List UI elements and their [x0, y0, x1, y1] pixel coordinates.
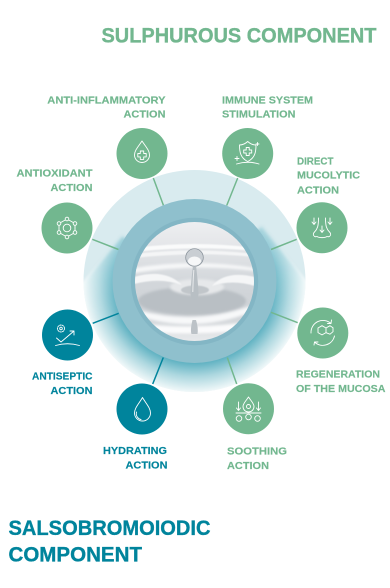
disc shadow: [84, 226, 306, 392]
node: soothing action: [223, 383, 287, 472]
label: STIMULATION: [222, 109, 296, 121]
label: IMMUNE SYSTEM: [222, 94, 313, 106]
label: ACTION: [50, 182, 92, 194]
node: immune system stimulation: [222, 94, 313, 179]
label: ACTION: [50, 385, 92, 397]
label: SOOTHING: [227, 445, 287, 457]
label: ACTION: [227, 460, 269, 472]
node: antioxidant action: [16, 168, 93, 254]
node: regeneration of the mucosa: [296, 308, 386, 395]
label: [47, 94, 165, 121]
label: MUCOLYTIC: [297, 170, 360, 182]
label: DIRECT: [297, 155, 334, 167]
label: [16, 168, 93, 194]
title: salsobromoiodic component: COMPONENT: [8, 544, 142, 566]
label: ANTI-INFLAMMATORY: [47, 94, 165, 106]
icon: drop, arrows and cells: [236, 397, 261, 421]
label: [32, 371, 93, 397]
icon: molecule ring: [57, 217, 77, 239]
circle: [42, 202, 92, 254]
circle: [42, 310, 93, 360]
label: [227, 445, 287, 472]
circle: [296, 202, 348, 253]
icon: germ with check arrow: [56, 325, 80, 346]
icon: nose with arrows: [312, 218, 332, 238]
water drop photo: [134, 221, 255, 342]
blue ring: [112, 199, 276, 363]
label: [103, 445, 168, 471]
icon: drop with cross: [134, 141, 150, 163]
label: OF THE MUCOSA: [296, 383, 386, 395]
label: [222, 94, 313, 121]
node: direct mucolytic action: [296, 155, 360, 253]
label: REGENERATION: [296, 369, 380, 381]
inner ring: [131, 218, 258, 345]
title: salsobromoiodic component: SALSOBROMOIODIC: [8, 517, 210, 540]
title: sulphurous component: SULPHUROUS COMPONENT: [102, 24, 377, 48]
label: ANTISEPTIC: [32, 371, 93, 383]
circle: [116, 128, 168, 179]
label: HYDRATING: [103, 445, 167, 457]
label: ACTION: [124, 109, 166, 121]
label: ACTION: [297, 184, 339, 196]
node: anti-inflammatory action: [47, 94, 167, 179]
circle: [223, 383, 274, 434]
circle: [222, 128, 273, 179]
icon: shield with cross: [235, 142, 259, 164]
connector lines: [92, 178, 298, 384]
central diagram: [84, 170, 306, 392]
circle: [297, 308, 348, 358]
label: [297, 155, 360, 196]
icon: water drop: [134, 398, 150, 421]
node: hydrating action: [103, 384, 168, 471]
label: ACTION: [126, 459, 168, 471]
label: ANTIOXIDANT: [16, 168, 93, 180]
circle: [116, 384, 168, 434]
title: salsobromoiodic component: [8, 517, 210, 566]
node: antiseptic action: [32, 310, 93, 397]
icon: molecule with cycle arrows: [311, 320, 334, 345]
pale outer disc: [84, 170, 306, 392]
label: [296, 369, 386, 395]
